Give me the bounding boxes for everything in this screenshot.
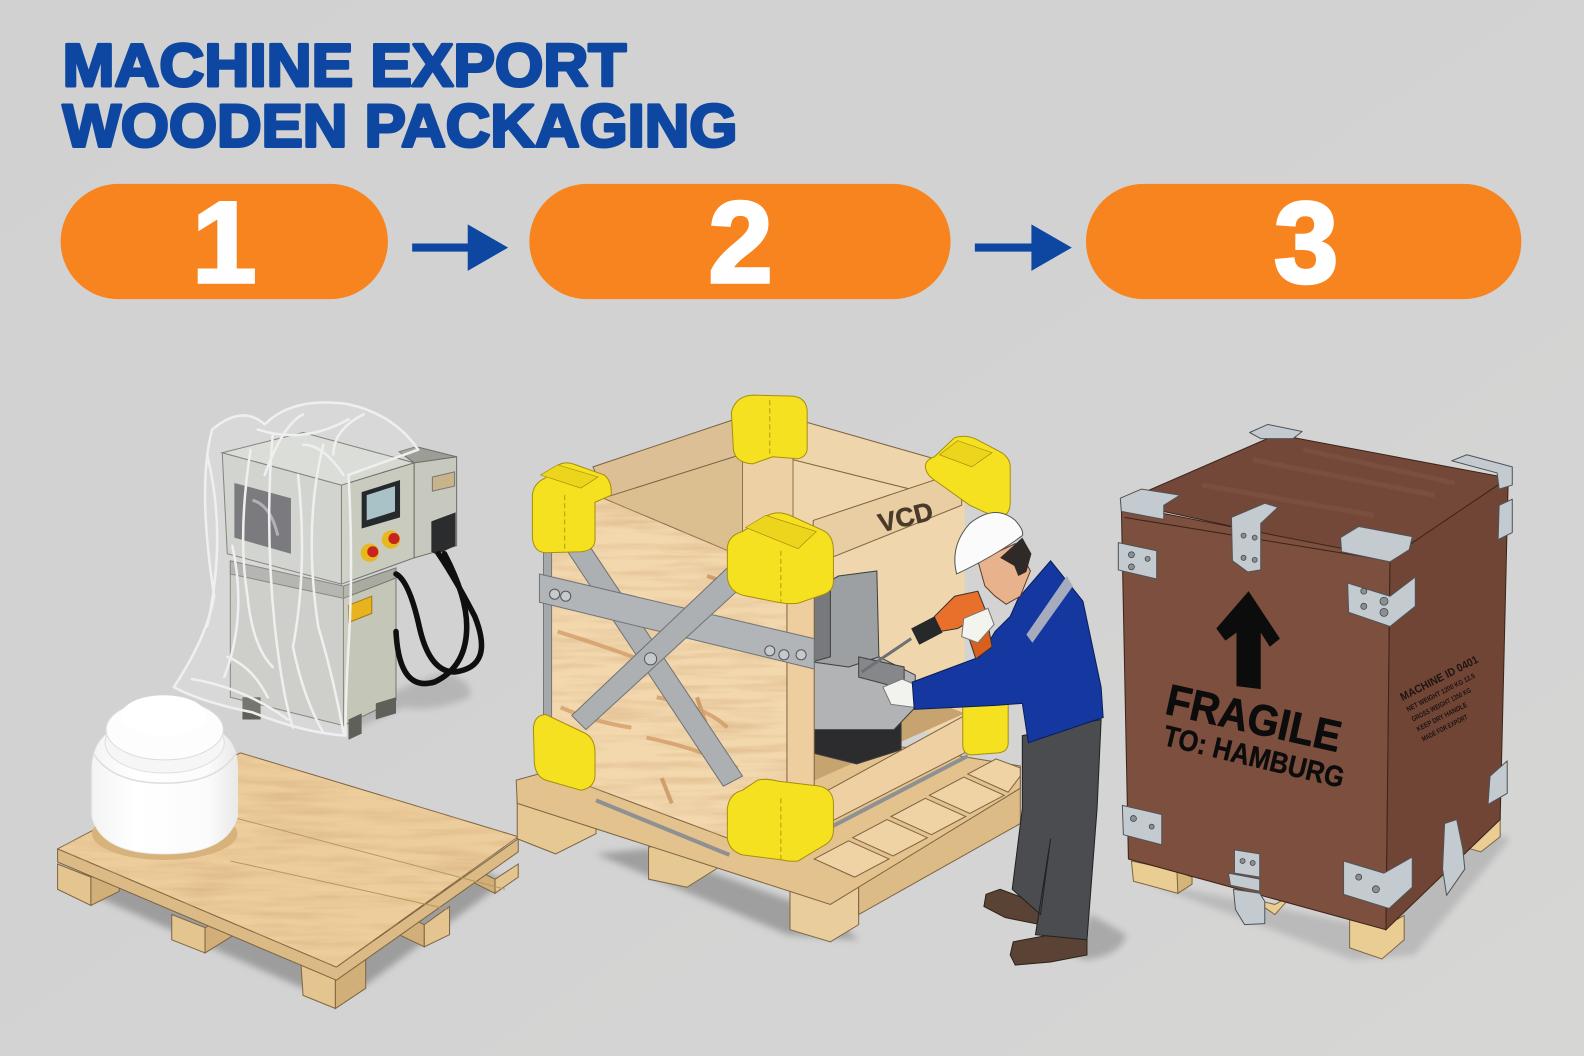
left glove [962, 608, 994, 643]
steel corner brackets [1118, 424, 1512, 925]
wooden crate on pallet [516, 395, 1020, 942]
finished closed crate [1118, 424, 1512, 960]
control screen [362, 480, 400, 529]
protector top facets [540, 441, 992, 549]
title: MACHINE EXPORT [63, 31, 626, 99]
step 3 pill [1086, 179, 1521, 307]
side stencil text: NET WEIGHT 1200 KG 12.5 [1406, 673, 1477, 714]
boots [984, 889, 1087, 965]
crate shadow [596, 849, 859, 940]
pallet slats [814, 759, 1020, 877]
side stencil text: MADE FOR EXPORT [1421, 714, 1470, 743]
left edge post [543, 546, 552, 723]
arrow: step 2 to 3 [975, 224, 1072, 271]
plastic film [174, 402, 418, 736]
neck and face [978, 544, 1030, 604]
reflective stripe [1026, 576, 1073, 643]
emergency stop buttons [361, 531, 400, 562]
pallet deck top [58, 753, 518, 967]
pallet deck [516, 728, 1020, 904]
pallet 1 shadow [91, 857, 505, 988]
hair [1000, 538, 1031, 576]
white foam jar [92, 695, 237, 860]
lid seam [1124, 517, 1390, 561]
side stencil text: MACHINE ID 0401 [1398, 654, 1480, 704]
worker drilling [862, 513, 1126, 965]
warning label [349, 596, 372, 622]
board seams [230, 819, 505, 909]
crate front face [1121, 505, 1390, 930]
machine inside crate [812, 571, 915, 764]
back corner post [742, 455, 793, 586]
destination text: TO: HAMBURG [1160, 719, 1348, 795]
right glove [883, 679, 921, 707]
arrow: step 1 to 2 [412, 224, 508, 271]
step 3 pill: 3 [1274, 179, 1338, 307]
machine window [234, 483, 291, 554]
side stencil text: GROSS WEIGHT 1350 KG [1411, 687, 1473, 723]
machine upper body [222, 433, 457, 584]
jar shoulder ring [93, 753, 236, 783]
jar neck [105, 712, 224, 773]
front corner post [787, 596, 814, 793]
protector fold lines [565, 400, 781, 860]
plug [431, 512, 456, 555]
bracket bolts [1128, 533, 1388, 893]
plywood grain [558, 576, 737, 803]
crate top face [1121, 435, 1508, 561]
interior back right [793, 435, 965, 733]
left plywood face [546, 495, 788, 839]
back rails [593, 417, 934, 497]
jar ground ring [92, 807, 237, 860]
pallet deck side [58, 839, 518, 980]
side label [432, 472, 455, 491]
interior back left [596, 433, 742, 728]
title: WOODEN PACKAGING [63, 92, 737, 160]
top face streaks [1202, 450, 1455, 515]
pallet blocks [517, 778, 1020, 942]
right wall lower rail [813, 715, 965, 831]
machine lower cabinet [230, 561, 396, 726]
step 1 pill [61, 179, 388, 307]
trousers [1012, 719, 1101, 940]
front right rail with stencil [813, 471, 962, 562]
title [63, 31, 737, 160]
crate feet [1131, 817, 1500, 959]
jar lid [121, 695, 206, 736]
bottom steel rail [596, 800, 729, 855]
black cables [396, 554, 482, 684]
jar body [92, 726, 237, 854]
metal straps [539, 544, 814, 786]
worker shadow [1071, 915, 1126, 960]
step 2 pill: 2 [708, 179, 773, 307]
upward arrow [1216, 591, 1280, 689]
steel rail under wall [816, 756, 968, 835]
fragile text: FRAGILE [1162, 676, 1346, 762]
step 2 pill [529, 179, 951, 307]
machine shadow [343, 672, 470, 730]
crate floor [808, 697, 965, 783]
yellow corner protectors [532, 395, 1010, 861]
front right rail with stencil: VCD [875, 496, 936, 538]
machine feet [242, 697, 396, 740]
machine wrapped in film [174, 402, 482, 740]
empty wooden pallet [58, 753, 518, 1009]
strap bolts [550, 589, 806, 665]
hard hat [955, 513, 1023, 574]
step 1 pill: 1 [192, 179, 256, 307]
pallet blocks [58, 861, 518, 1009]
ground shadow [1136, 829, 1510, 960]
power drill [862, 591, 992, 672]
side stencil text: KEEP DRY HANDLE [1416, 702, 1469, 733]
crate right face [1386, 478, 1508, 930]
jacket [912, 561, 1103, 743]
side stencil text [1398, 654, 1501, 743]
